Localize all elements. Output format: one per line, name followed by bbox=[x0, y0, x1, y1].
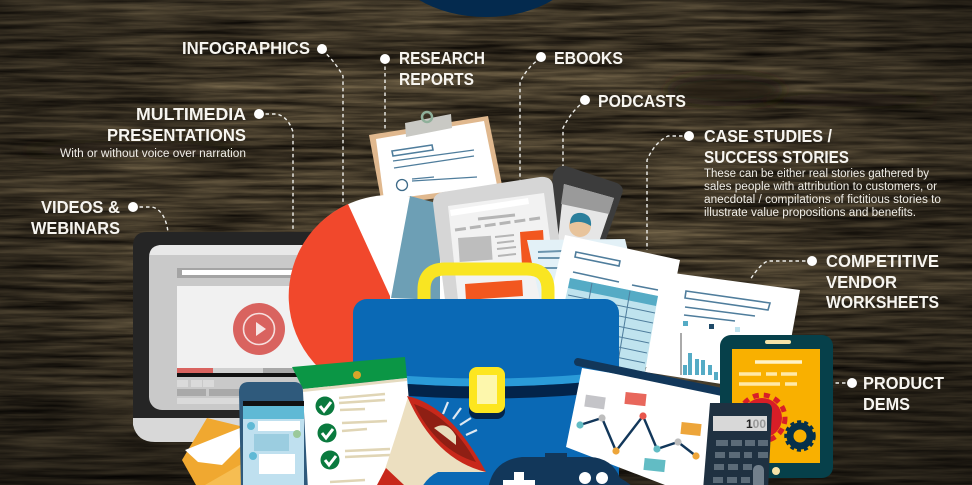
label: product demos: PRODUCT bbox=[863, 373, 944, 393]
icon: clipboard bbox=[369, 112, 503, 205]
label: competitive vendor worksheets: VENDOR bbox=[826, 272, 897, 292]
icon: amber tablet with gears bbox=[720, 335, 833, 478]
top navy semicircle bbox=[391, 0, 581, 17]
label: competitive vendor worksheets: WORKSHEETS bbox=[826, 292, 939, 312]
icon: game controller bbox=[488, 453, 640, 485]
label: videos and webinars bbox=[31, 197, 138, 238]
label: product demos: DEMS bbox=[863, 394, 910, 414]
label: case studies: illustrate value propositions and benefits. bbox=[704, 207, 916, 219]
icon: whiteboard chart bbox=[566, 362, 722, 485]
label: multimedia presentations: With or without voice over narration bbox=[60, 148, 246, 160]
label: case studies bbox=[684, 126, 941, 219]
icon: web page tablet bbox=[433, 177, 566, 300]
label: infographics: INFOGRAPHICS bbox=[182, 38, 310, 58]
label: case studies: anecdotal / compilations of fictitious stories to bbox=[704, 194, 941, 206]
label: videos and webinars: WEBINARS bbox=[31, 218, 120, 238]
label: podcasts: PODCASTS bbox=[598, 91, 686, 111]
label: case studies: sales people with attribution to customers, or bbox=[704, 181, 937, 193]
label: multimedia presentations: PRESENTATIONS bbox=[107, 125, 246, 145]
label: videos and webinars: VIDEOS & bbox=[41, 197, 120, 217]
icon: checklist bbox=[292, 357, 416, 485]
label: research reports: REPORTS bbox=[399, 69, 474, 89]
icon: briefcase bbox=[353, 269, 619, 485]
icon: smartphone with profile bbox=[548, 166, 623, 245]
label: product demos bbox=[847, 373, 944, 414]
icon: calculator: 100 bbox=[746, 417, 766, 431]
label: ebooks: EBOOKS bbox=[554, 48, 623, 68]
icon: megaphone bbox=[377, 396, 486, 485]
connector lines bbox=[133, 50, 852, 383]
label: case studies: CASE STUDIES / bbox=[704, 126, 832, 146]
label: research reports bbox=[380, 48, 485, 89]
label: research reports: RESEARCH bbox=[399, 48, 485, 68]
label: competitive vendor worksheets bbox=[807, 251, 939, 312]
label: case studies: SUCCESS STORIES bbox=[704, 147, 849, 167]
icon: laptop with video player bbox=[133, 232, 330, 442]
label: multimedia presentations bbox=[60, 104, 264, 160]
icon: envelope bbox=[182, 418, 245, 485]
icon: calculator bbox=[703, 403, 772, 485]
icon: chat smartphone bbox=[239, 382, 308, 485]
label: competitive vendor worksheets: COMPETITIVE bbox=[826, 251, 939, 271]
label: case studies: These can be either real stories gathered by bbox=[704, 168, 929, 180]
icon: worksheets bbox=[527, 235, 800, 390]
icon: pie chart bbox=[289, 195, 491, 397]
label: multimedia presentations: MULTIMEDIA bbox=[136, 104, 246, 124]
